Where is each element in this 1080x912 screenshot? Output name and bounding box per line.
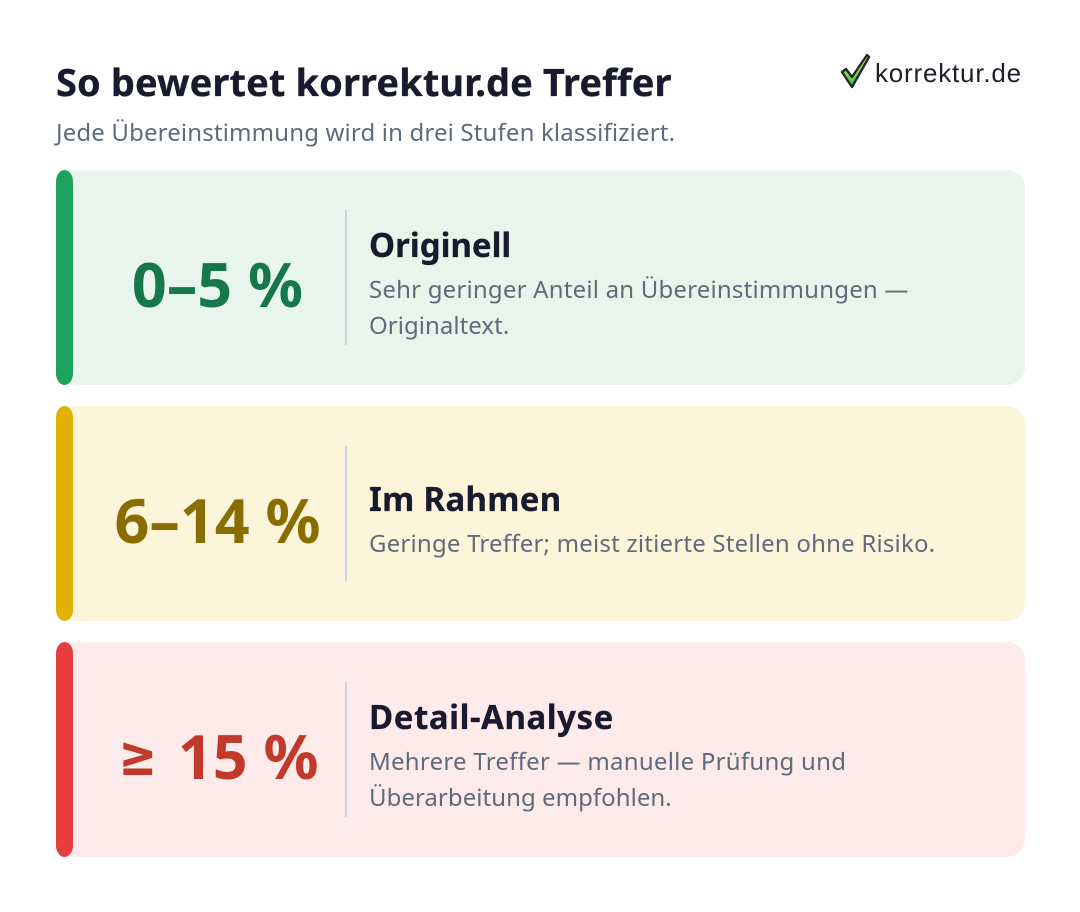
title: So bewertet korrektur.de Treffer	[56, 56, 672, 108]
yellow accent bar	[56, 406, 73, 621]
description: Originaltext.	[369, 309, 509, 342]
description	[369, 273, 909, 342]
vertical divider	[345, 682, 347, 817]
range value: ≥	[118, 723, 157, 789]
green accent bar	[56, 170, 73, 385]
vertical divider	[345, 210, 347, 345]
range value: 6–14 %	[114, 478, 321, 561]
logo wordmark: korrektur.de	[875, 58, 1022, 88]
panel: Im Rahmen	[56, 406, 1025, 621]
range value: 0–5 %	[132, 242, 303, 325]
red accent bar	[56, 642, 73, 857]
description: Geringe Treffer; meist zitierte Stellen ohne Risiko.	[369, 527, 935, 560]
panel: Detail-Analyse	[56, 642, 1025, 857]
subtitle: Jede Übereinstimmung wird in drei Stufen klassifiziert.	[56, 116, 675, 149]
description: Überarbeitung empfohlen.	[369, 781, 672, 814]
heading: Originell	[369, 222, 511, 267]
panel: Originell	[56, 170, 1025, 385]
heading: Detail-Analyse	[369, 694, 614, 739]
heading: Im Rahmen	[369, 476, 561, 521]
range value: 15 %	[178, 714, 319, 797]
description	[369, 745, 846, 814]
logo: korrektur.de	[840, 54, 1022, 88]
description: Sehr geringer Anteil an Übereinstimmungen —	[369, 273, 909, 306]
description: Mehrere Treffer — manuelle Prüfung und	[369, 745, 846, 778]
vertical divider	[345, 446, 347, 581]
icon: check mark	[840, 54, 870, 88]
